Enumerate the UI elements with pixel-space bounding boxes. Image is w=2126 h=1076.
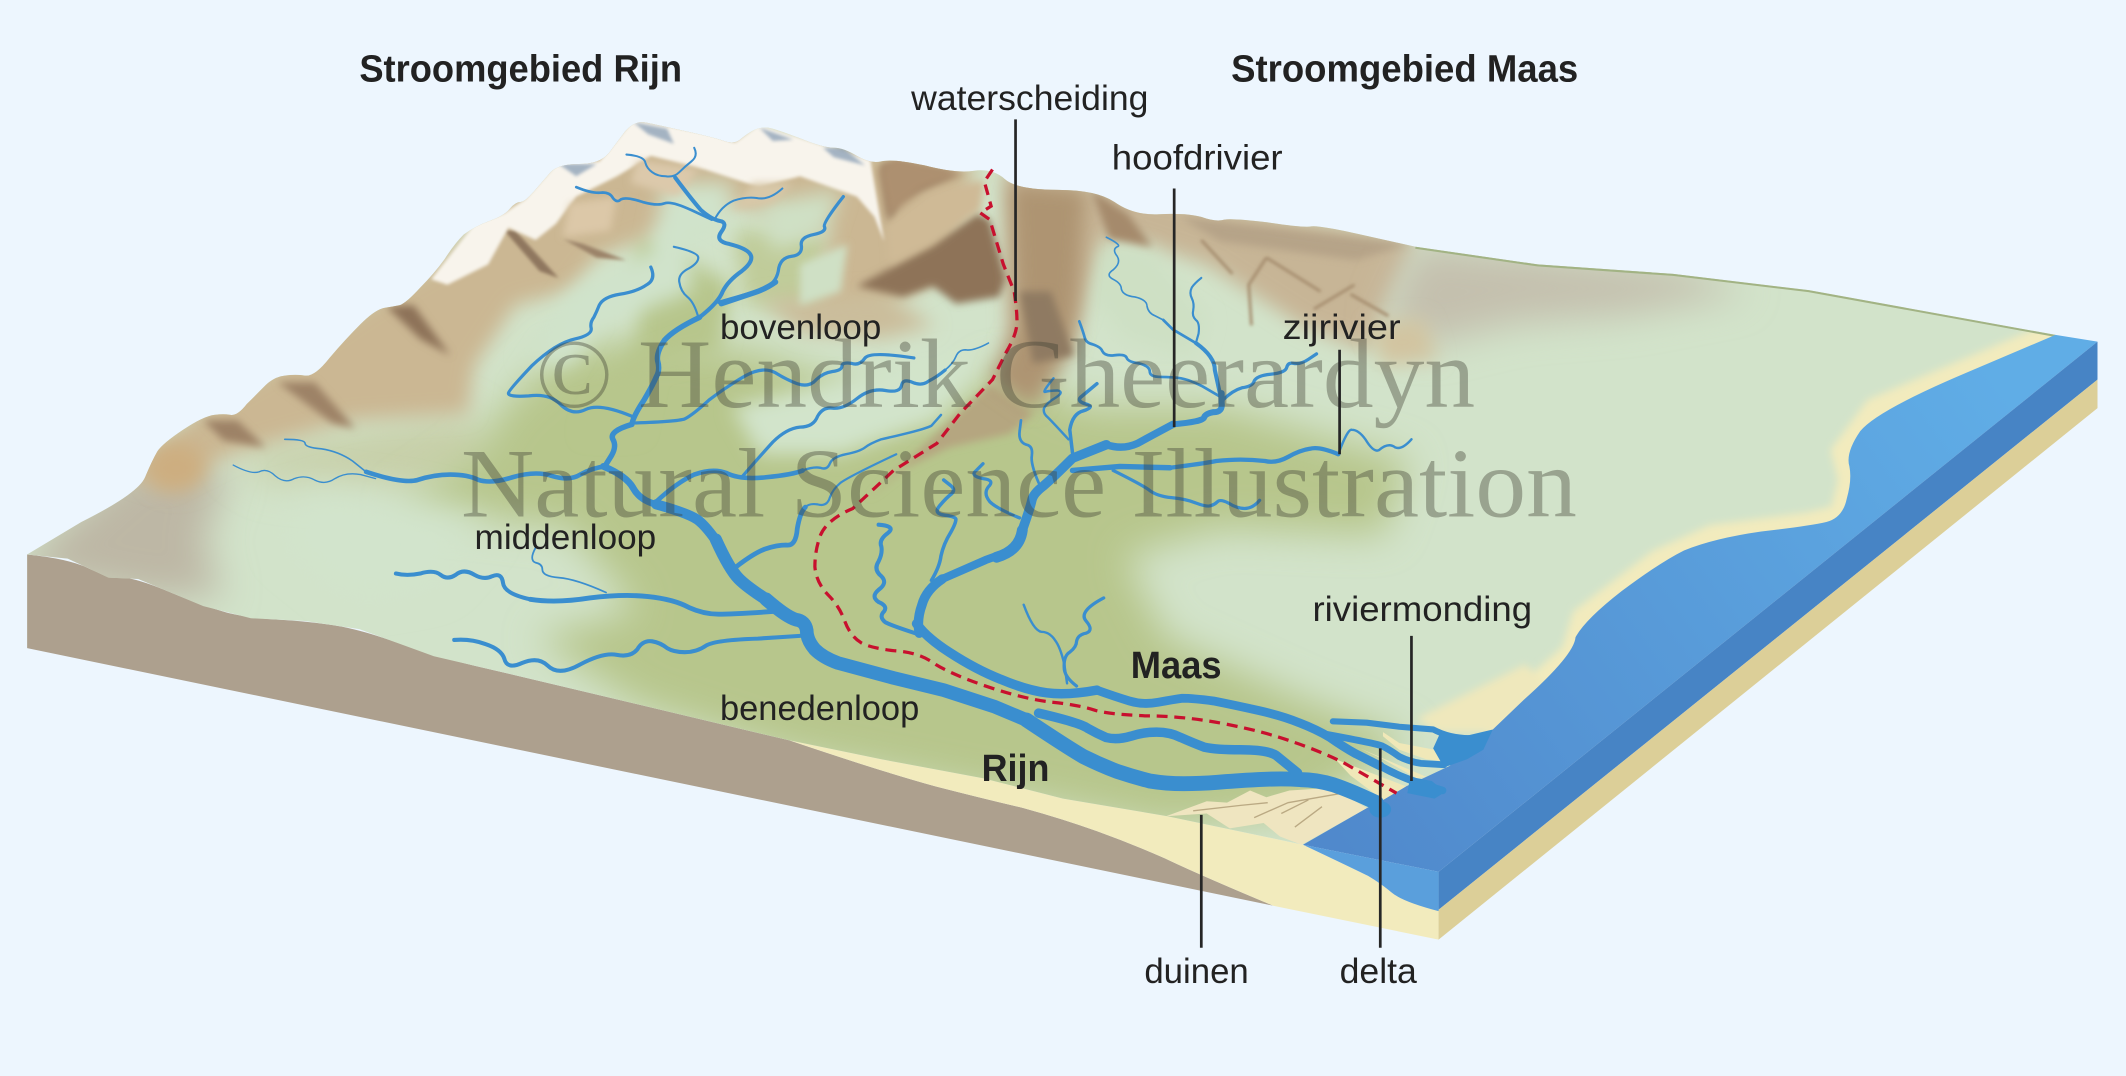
watermark: © Hendrik Gheerardyn xyxy=(536,320,1475,429)
coast sand strip xyxy=(1490,335,2055,732)
sea dark right face xyxy=(1439,342,2098,910)
leader line: hoofdrivier xyxy=(1173,188,1175,427)
sea bed right face xyxy=(1439,380,2098,940)
orange-tan patch xyxy=(146,443,206,492)
river mouth fans xyxy=(1369,729,1493,818)
watermark xyxy=(461,320,1577,539)
river system: Maas xyxy=(875,237,1479,790)
tan mountains left xyxy=(122,115,976,488)
label: waterscheiding: waterscheiding xyxy=(910,79,1148,118)
snow shadows xyxy=(559,122,865,176)
label: delta: delta xyxy=(1340,952,1417,991)
tan slopes above bovenloop xyxy=(759,293,936,339)
leader line: delta xyxy=(1379,748,1381,948)
delta islands xyxy=(1336,732,1456,800)
heading: Stroomgebied Maas: Stroomgebied Maas xyxy=(1231,48,1578,90)
sand front slope xyxy=(789,740,1439,940)
sea front wedge xyxy=(1303,845,1439,911)
label: duinen: duinen xyxy=(1144,952,1249,991)
river system: Rijn xyxy=(233,148,1383,809)
watershed: red dashed divide xyxy=(815,169,1397,793)
dunes xyxy=(1166,788,1367,845)
terrain surface xyxy=(27,122,2056,844)
leader line: riviermonding xyxy=(1410,636,1412,781)
block diagram: landscape xyxy=(0,81,2126,940)
label: hoofdrivier: hoofdrivier xyxy=(1112,138,1283,177)
label: bovenloop: bovenloop xyxy=(720,308,881,347)
brown side face xyxy=(27,555,1273,906)
snow cap xyxy=(431,119,884,285)
sea top surface xyxy=(1303,335,2098,872)
label: zijrivier: zijrivier xyxy=(1283,308,1401,347)
label: benedenloop: benedenloop xyxy=(720,689,919,728)
gray left corner xyxy=(14,461,231,597)
olive foothills xyxy=(244,416,482,494)
light valley patches xyxy=(522,183,732,366)
heading: Stroomgebied Rijn: Stroomgebied Rijn xyxy=(359,48,682,90)
label: Maas: Maas xyxy=(1131,645,1222,687)
tan east uplands xyxy=(1003,163,1417,366)
watermark: Natural Science Illustration xyxy=(461,430,1577,539)
dark ridges left xyxy=(386,305,450,355)
leader line: duinen xyxy=(1200,815,1202,948)
green edge shading on ridge xyxy=(1416,247,2055,335)
dark valley rock xyxy=(857,213,1006,304)
brown slope below divide xyxy=(894,383,1032,476)
label: riviermonding: riviermonding xyxy=(1312,590,1532,629)
leader line: zijrivier xyxy=(1339,350,1341,454)
leader line: waterscheiding xyxy=(1015,119,1017,301)
green basin xyxy=(393,339,1410,827)
label: middenloop: middenloop xyxy=(475,518,656,557)
label: Rijn: Rijn xyxy=(982,748,1049,790)
